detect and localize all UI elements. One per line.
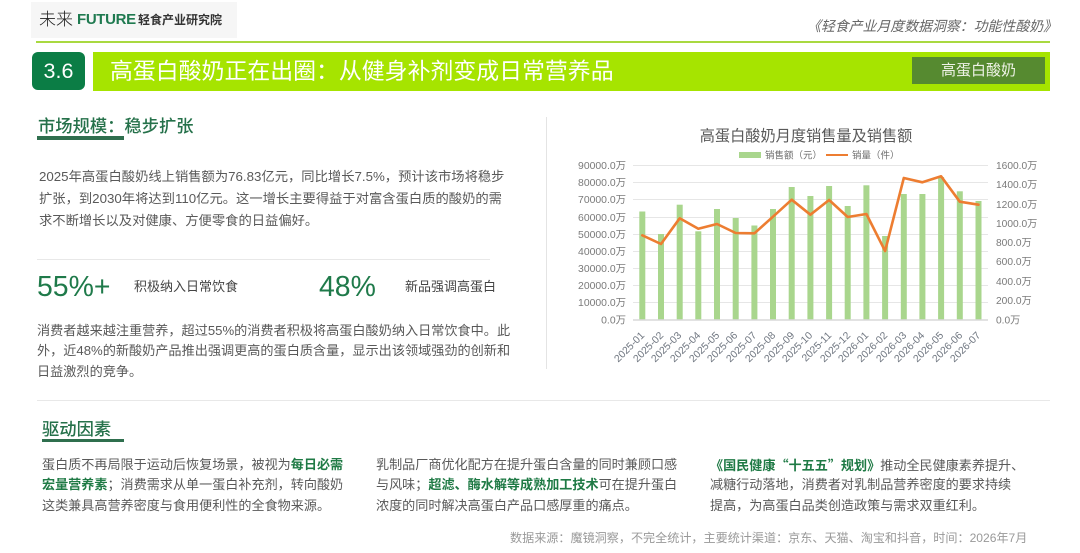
stat: 48%: [319, 271, 496, 303]
report name: 《轻食产业月度数据洞察：功能性酸奶》: [807, 18, 1057, 34]
x axis labels: 2026-05: [912, 330, 946, 365]
x axis labels: 2026-01: [837, 330, 871, 365]
title banner: [93, 52, 1050, 91]
driver text 2: 乳制品厂商优化配方在提升蛋白含量的同时兼顾口感: [376, 457, 677, 472]
logo: [31, 2, 237, 38]
left axis labels: 90000.0万: [578, 161, 626, 172]
right axis labels: 800.0万: [996, 238, 1032, 249]
x axis labels: 2026-03: [875, 330, 909, 365]
legend: 销量（件）: [852, 150, 900, 162]
x axis labels: 2025-03: [650, 330, 684, 365]
stat: 55%+: 积极纳入日常饮食: [134, 279, 238, 294]
stat: 48%: 48%: [319, 271, 376, 303]
left axis labels: 70000.0万: [578, 195, 626, 206]
title: 高蛋白酸奶正在出圈：从健身补剂变成日常营养品: [110, 58, 614, 84]
driver text 2: 与风味；超滤、酶水解等成熟加工技术可在提升蛋白: [376, 477, 677, 492]
driver text 1: 蛋白质不再局限于运动后恢复场景，被视为每日必需: [42, 457, 343, 472]
left axis labels: 60000.0万: [578, 213, 626, 224]
tag: 高蛋白酸奶: [941, 62, 1016, 79]
left axis labels: 20000.0万: [578, 281, 626, 292]
section number badge: [32, 52, 85, 90]
x axis labels: 2025-07: [725, 330, 759, 365]
logo: FUTURE: [77, 11, 136, 28]
paragraph: market size: 求不断增长以及对健康、方便零食的日益偏好。: [39, 213, 318, 228]
paragraph: consumers: 外，近48%的新酸奶产品推出强调更高的蛋白质含量，显示出该领域强劲的创新和: [37, 343, 510, 358]
section number badge: 3.6: [44, 59, 73, 83]
right axis labels: [996, 161, 1037, 326]
line: sales volume: [642, 176, 978, 251]
horizontal divider: [37, 400, 1050, 401]
driver text 3: 减糖行动落地，消费者对乳制品营养密度的要求持续: [710, 477, 1011, 492]
heading: market size: 市场规模：稳步扩张: [38, 116, 194, 136]
driver text 3: 提高，为高蛋白品类创造政策与需求双重红利。: [710, 498, 985, 513]
heading underline: [42, 439, 124, 442]
x axis labels: 2025-10: [781, 330, 815, 365]
left axis labels: 50000.0万: [578, 230, 626, 241]
x axis labels: 2025-01: [613, 330, 647, 365]
driver text 1: 宏量营养素；消费需求从单一蛋白补充剂，转向酸奶: [42, 477, 343, 492]
x axis labels: 2026-02: [856, 330, 890, 365]
right axis labels: 600.0万: [996, 257, 1032, 268]
header rule: [36, 41, 1050, 43]
x axis labels: 2025-09: [763, 330, 797, 365]
paragraph: consumers: 日益激烈的竞争。: [37, 364, 142, 379]
source note: 数据来源：魔镜洞察，不完全统计，主要统计渠道：京东、天猫、淘宝和抖音，时间：2026年7月: [510, 531, 1027, 545]
paragraph: consumers: 消费者越来越注重营养，超过55%的消费者积极将高蛋白酸奶纳入日常饮食中。此: [37, 323, 510, 338]
driver text 2: 浓度的同时解决高蛋白产品口感厚重的痛点。: [376, 498, 638, 513]
right axis labels: 400.0万: [996, 277, 1032, 288]
left axis labels: 0.0万: [601, 316, 626, 326]
x axis labels: 2025-04: [669, 330, 703, 365]
heading: drivers: 驱动因素: [42, 419, 111, 439]
x axis labels: 2025-06: [706, 330, 740, 365]
left axis labels: [578, 161, 626, 326]
axis baseline: [633, 319, 988, 321]
chart: monthly sales: [578, 128, 1037, 365]
driver text 1: [42, 457, 343, 513]
driver text 3: 《国民健康“十五五”规划》推动全民健康素养提升、: [710, 455, 1024, 474]
right axis labels: 1400.0万: [996, 180, 1037, 191]
right axis labels: 1000.0万: [996, 219, 1037, 230]
bars: sales value: [639, 177, 982, 320]
left axis labels: 30000.0万: [578, 264, 626, 275]
x axis labels: 2026-04: [893, 330, 927, 365]
right axis labels: 1200.0万: [996, 200, 1037, 211]
x axis labels: 2026-06: [931, 330, 965, 365]
right axis labels: 1600.0万: [996, 161, 1037, 172]
x axis labels: 2025-12: [819, 330, 853, 365]
paragraph: market size: 扩张，到2030年将达到110亿元。这一增长主要得益于对富含蛋白质的酸奶的需: [39, 191, 502, 206]
chart title: 高蛋白酸奶月度销售量及销售额: [700, 128, 912, 145]
divider: [37, 259, 490, 260]
left axis labels: 80000.0万: [578, 178, 626, 189]
x axis labels: 2025-11: [800, 330, 834, 364]
heading underline: [37, 136, 124, 140]
left axis labels: 40000.0万: [578, 247, 626, 258]
x axis labels: 2026-07: [949, 330, 983, 365]
vertical divider: [546, 117, 547, 369]
logo: 轻食产业研究院: [138, 13, 222, 27]
x axis labels: 2025-02: [632, 330, 666, 365]
left axis labels: 10000.0万: [578, 298, 626, 309]
driver text 2: [376, 457, 677, 513]
x axis labels: 2025-05: [688, 330, 722, 365]
x axis labels: [613, 330, 983, 365]
right axis labels: 200.0万: [996, 296, 1032, 307]
legend: [739, 150, 900, 162]
right axis labels: 0.0万: [996, 316, 1020, 326]
tag: [912, 57, 1045, 84]
x axis labels: 2025-08: [744, 330, 778, 365]
paragraph: consumers: [37, 323, 510, 379]
paragraph: market size: [39, 169, 504, 228]
stat: 48%: 新品强调高蛋白: [405, 279, 496, 294]
logo: 未来: [39, 10, 73, 29]
driver text 1: 这类兼具高营养密度与食用便利性的全食物来源。: [42, 498, 330, 513]
paragraph: market size: 2025年高蛋白酸奶线上销售额为76.83亿元，同比增长7.5%，预计该市场将稳步: [39, 169, 504, 184]
legend: 销售额（元）: [765, 150, 822, 162]
stat: 55%+: [37, 271, 238, 303]
driver text 3: [710, 455, 1024, 513]
stat: 55%+: 55%+: [37, 271, 110, 303]
